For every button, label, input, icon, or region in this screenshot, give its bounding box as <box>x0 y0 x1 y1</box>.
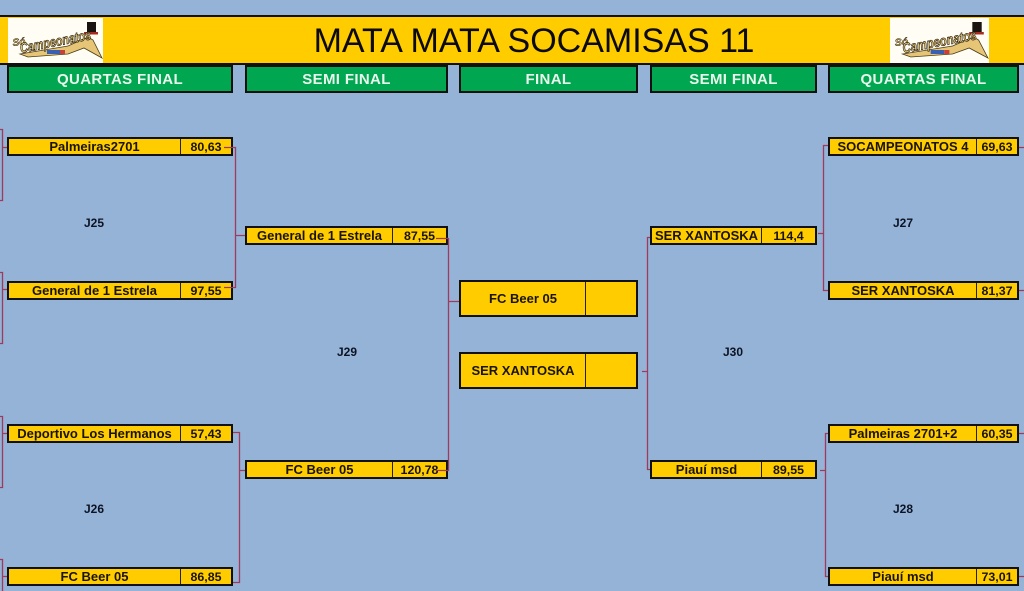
team: Piauí msd: 73,01 <box>981 570 1012 584</box>
semi team: Piauí msd <box>650 460 817 479</box>
semi team: FC Beer 05 <box>245 460 448 479</box>
match label J27: J27 <box>893 216 913 230</box>
semi team: FC Beer 05: FC Beer 05 <box>286 462 353 477</box>
team: General de 1 Estrela: General de 1 Estrela <box>32 283 157 298</box>
team: General de 1 Estrela: 97,55 <box>190 284 222 298</box>
heading: quartas final right: QUARTAS FINAL <box>861 71 986 88</box>
logo right <box>890 18 989 63</box>
heading: semi final left <box>245 65 448 93</box>
team: SOCAMPEONATOS 4: SOCAMPEONATOS 4 <box>838 139 968 154</box>
team: Piauí msd: Piauí msd <box>872 569 934 584</box>
team: SER XANTOSKA: SER XANTOSKA <box>851 283 955 298</box>
team: General de 1 Estrela <box>7 281 233 300</box>
semi team: General de 1 Estrela: 87,55 <box>404 229 435 243</box>
team: Deportivo Los Hermanos: Deportivo Los Hermanos <box>17 426 172 441</box>
semi team: General de 1 Estrela: General de 1 Estrela <box>257 228 382 243</box>
match label J28: J28 <box>893 502 913 516</box>
semi team: General de 1 Estrela <box>245 226 448 245</box>
team: Palmeiras2701: 80,63 <box>190 140 222 154</box>
team: FC Beer 05 <box>7 567 233 586</box>
semi team: Piauí msd: Piauí msd <box>676 462 737 477</box>
semi team: Piauí msd: 89,55 <box>773 463 804 477</box>
match label J26: J26 <box>84 502 104 516</box>
team: Palmeiras 2701+2: 60,35 <box>981 427 1012 441</box>
logo left <box>8 18 103 63</box>
team: Piauí msd <box>828 567 1019 586</box>
logo left: Só <box>12 37 26 49</box>
finalist: FC Beer 05: FC Beer 05 <box>489 291 557 306</box>
semi team: SER XANTOSKA: SER XANTOSKA <box>655 228 758 243</box>
heading: final <box>459 65 638 93</box>
heading: semi final left: SEMI FINAL <box>302 71 391 88</box>
team: Deportivo Los Hermanos: 57,43 <box>190 427 222 441</box>
semi team: SER XANTOSKA: 114,4 <box>773 229 804 243</box>
team: SOCAMPEONATOS 4: 69,63 <box>981 140 1012 154</box>
team: Deportivo Los Hermanos <box>7 424 233 443</box>
finalist: SER XANTOSKA: SER XANTOSKA <box>471 363 575 378</box>
finalist: FC Beer 05 <box>459 280 638 317</box>
semi team: FC Beer 05: 120,78 <box>401 463 438 477</box>
team: Palmeiras 2701+2: Palmeiras 2701+2 <box>849 426 957 441</box>
finalist: SER XANTOSKA <box>459 352 638 389</box>
title banner <box>0 15 1024 65</box>
team: Palmeiras 2701+2 <box>828 424 1019 443</box>
semi team: SER XANTOSKA <box>650 226 817 245</box>
title: MATA MATA SOCAMISAS 11 <box>314 22 754 60</box>
heading: semi final right: SEMI FINAL <box>689 71 778 88</box>
heading: semi final right <box>650 65 817 93</box>
heading: quartas final left <box>7 65 233 93</box>
team: FC Beer 05: FC Beer 05 <box>61 569 128 584</box>
logo right: Só <box>894 37 909 49</box>
team: SER XANTOSKA: 81,37 <box>981 284 1012 298</box>
match label J30: J30 <box>723 345 743 359</box>
team: Palmeiras2701 <box>7 137 233 156</box>
heading: final: FINAL <box>526 71 571 88</box>
team: Palmeiras2701: Palmeiras2701 <box>49 139 140 154</box>
heading: quartas final right <box>828 65 1019 93</box>
team: SER XANTOSKA <box>828 281 1019 300</box>
match label J29: J29 <box>337 345 357 359</box>
team: FC Beer 05: 86,85 <box>190 570 222 584</box>
team: SOCAMPEONATOS 4 <box>828 137 1019 156</box>
heading: quartas final left: QUARTAS FINAL <box>57 71 183 88</box>
match label J25: J25 <box>84 216 104 230</box>
